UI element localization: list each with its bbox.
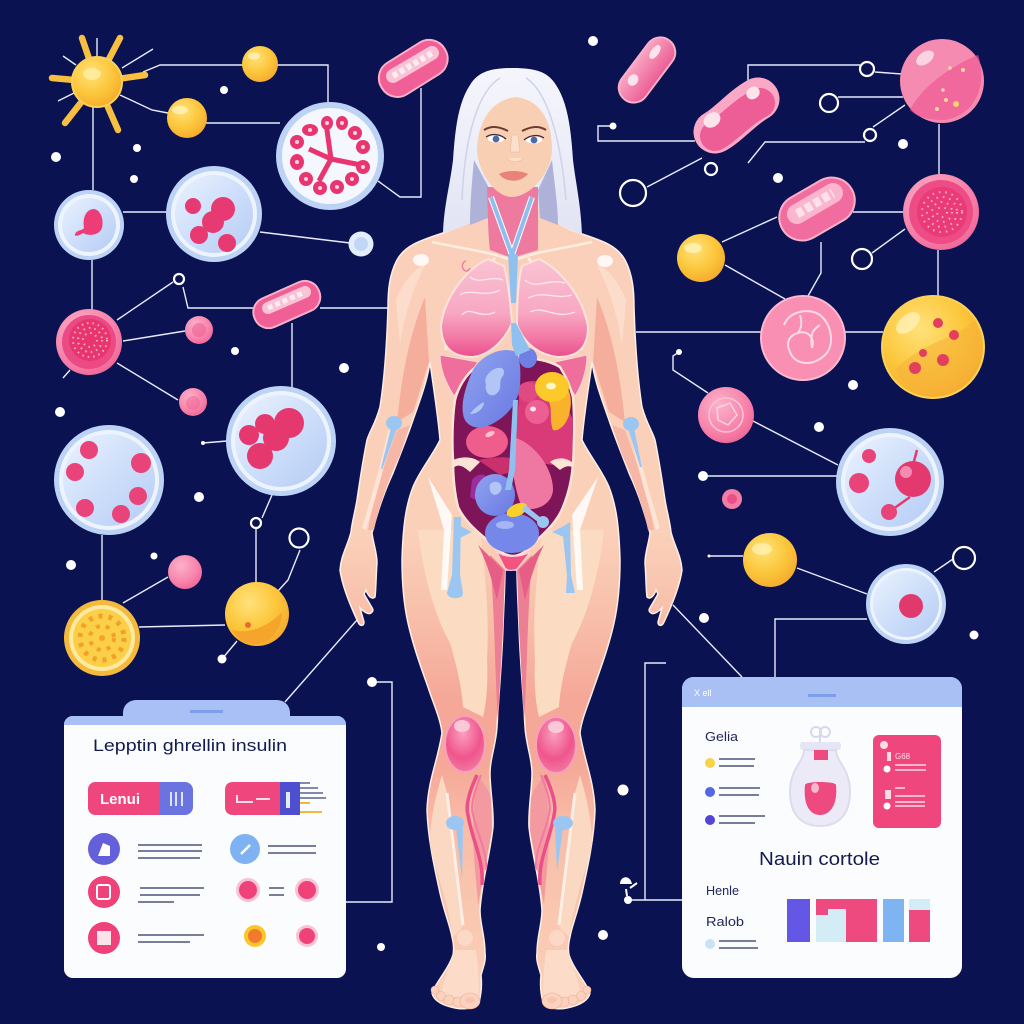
human body — [340, 68, 682, 1009]
face — [477, 97, 552, 197]
pink info card — [873, 735, 941, 828]
legend items — [705, 758, 765, 825]
eyebrows — [484, 127, 546, 131]
pink node bottom left — [168, 555, 202, 589]
yellow cell top — [242, 46, 278, 82]
large yellow cell — [882, 296, 984, 398]
panel tab — [123, 700, 290, 718]
pink dotted cell left — [56, 309, 122, 375]
row: paired pink dots — [236, 878, 319, 902]
nose — [507, 135, 523, 162]
row: pink book icon — [88, 922, 204, 954]
yellow cell lower right — [743, 533, 797, 587]
pelvic floor — [497, 552, 530, 570]
white cell with red star — [276, 102, 384, 210]
knee right — [536, 717, 576, 773]
purple organ — [470, 475, 490, 500]
panel header — [682, 677, 962, 707]
clavicles — [432, 242, 592, 350]
pink node lower — [179, 388, 207, 416]
panel card — [64, 716, 346, 978]
capsule top left — [372, 33, 454, 104]
hip highlights — [428, 477, 598, 590]
blue cell with large red cluster — [226, 386, 336, 496]
row: indigo icon — [88, 833, 202, 865]
legend item pale — [705, 939, 758, 949]
row: orange and pink dots — [244, 925, 318, 947]
icon: sun hormone cell — [52, 38, 153, 130]
diaphragm patches — [440, 355, 587, 396]
row: pink icon — [88, 876, 204, 908]
pink cell middle right — [698, 387, 754, 443]
eyes — [486, 135, 544, 144]
body silhouette — [340, 185, 682, 1009]
hair — [443, 68, 582, 235]
elbow vessels — [381, 416, 642, 470]
header label: X ell — [694, 688, 712, 698]
pink node — [185, 316, 213, 344]
pink dotted cell right — [903, 174, 979, 250]
label pill: Lenui — [88, 782, 193, 815]
upper blue gland — [519, 348, 537, 368]
label Henle: Henle — [706, 884, 739, 898]
yellow organ — [504, 500, 530, 520]
blue cell with red dots — [54, 425, 164, 535]
blue cell with heart — [54, 190, 124, 260]
side duct — [522, 505, 549, 528]
neck with vessels — [487, 187, 538, 258]
capsule right — [771, 169, 863, 249]
label Gelia: Gelia — [705, 730, 738, 744]
panel: hormones left — [64, 700, 346, 978]
bladder — [485, 513, 539, 553]
panel: hormones right — [682, 677, 962, 978]
bent capsule — [701, 84, 762, 136]
right lung — [517, 259, 588, 357]
gallbladder — [535, 372, 571, 430]
panel card — [682, 677, 962, 978]
liver highlight — [470, 368, 504, 414]
lung veins — [460, 277, 575, 315]
label Ralob: Ralob — [706, 915, 744, 929]
pink textured cell — [761, 296, 845, 380]
bar chart — [787, 899, 930, 942]
yellow cell right — [677, 234, 725, 282]
lips — [499, 171, 528, 181]
panel title: Lepptin ghrellin insulin — [93, 736, 287, 755]
small marker icon — [620, 877, 637, 896]
capsule top centre right — [613, 31, 681, 109]
pink organs — [453, 381, 573, 509]
row: blue icon — [230, 834, 316, 864]
pink cell top right — [900, 39, 984, 123]
capsule middle left — [249, 276, 325, 333]
clavicle vessels — [462, 261, 470, 271]
connector lines — [63, 65, 953, 902]
panel header strip — [64, 716, 346, 725]
yellow cell small — [167, 98, 207, 138]
ankle vessels — [446, 816, 573, 880]
panel heading: Nauin cortole — [759, 849, 880, 869]
label pill with bars — [225, 782, 326, 815]
hip blue vessels — [447, 517, 575, 598]
blue cell with red node — [836, 428, 944, 536]
yellow dotted cell — [64, 600, 140, 676]
abdominal cavity — [452, 358, 574, 556]
pink info card: G68 — [895, 752, 911, 761]
yellow cell bottom — [225, 582, 289, 646]
shoulder highlights — [413, 254, 613, 267]
left lung — [441, 259, 512, 357]
label pill: Lenui: Lenui — [100, 791, 140, 808]
knee left — [445, 716, 485, 772]
liver — [463, 350, 520, 428]
small pink node — [722, 489, 742, 509]
flask icon — [790, 727, 850, 826]
ring nodes — [174, 62, 975, 569]
pale blue node — [348, 232, 374, 256]
blue cell lower right — [866, 564, 946, 644]
central tube — [505, 254, 530, 490]
blue cell with red cluster — [166, 166, 262, 262]
left limb detail — [362, 265, 505, 1009]
lower blue organ — [475, 474, 515, 516]
right limb detail — [517, 265, 660, 1009]
